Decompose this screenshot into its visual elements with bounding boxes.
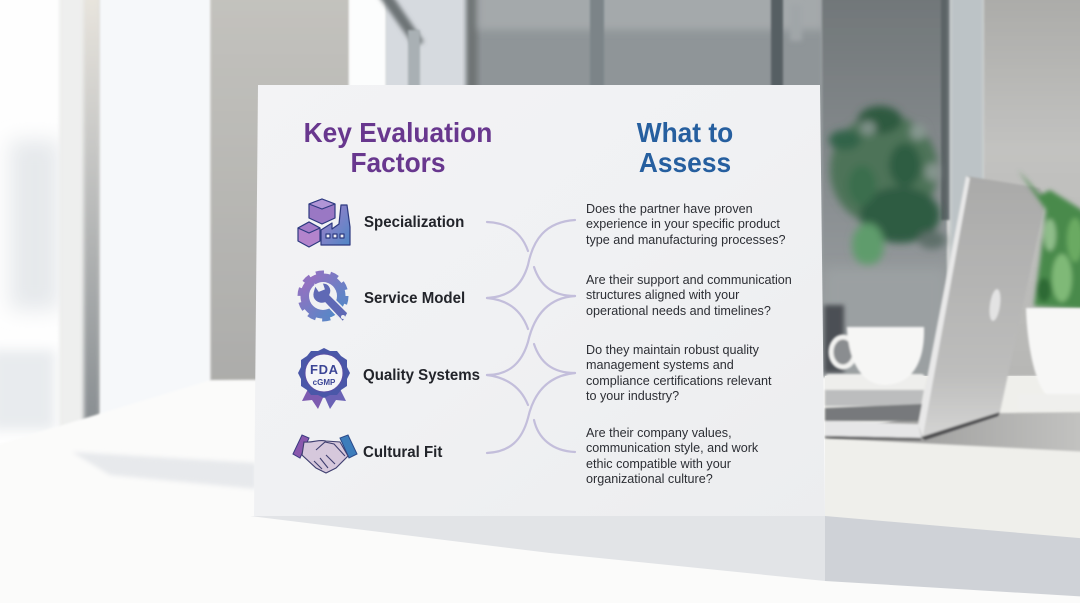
heading: Key Evaluation Factors: Key Evaluation [304,117,492,148]
text: cultural fit question: organizational culture? [586,472,713,486]
icon: FDA cGMP badge: cGMP [313,378,336,387]
text: service model question: structures aligned with your [586,288,739,302]
label: Cultural Fit: Cultural Fit [363,444,442,461]
label: Quality Systems: Quality Systems [363,367,480,384]
icon: gear and wrench [298,270,348,322]
text: quality systems question: Do they maintain robust quality [586,343,759,357]
text: cultural fit question: Are their company values, [586,426,732,440]
text: service model question [586,273,792,318]
text: service model question: Are their support and communication [586,273,792,287]
heading: Key Evaluation Factors [304,117,492,178]
text: cultural fit question [586,426,758,486]
text: service model question: operational needs and timelines? [586,304,771,318]
label: Specialization: Specialization [364,214,464,231]
text: quality systems question: to your industry? [586,389,679,403]
text: specialization question: Does the partner have proven [586,202,753,216]
heading: What to Assess [636,117,733,178]
icon: FDA cGMP badge [298,348,350,409]
blurred background plant [824,106,946,380]
heading: What to Assess: What to [637,117,733,148]
text: quality systems question: management systems and [586,358,734,372]
icon: handshake [292,434,358,474]
heading: What to Assess: Assess [639,147,731,178]
text: cultural fit question: ethic compatible with your [586,457,731,471]
heading: Key Evaluation Factors: Factors [350,147,446,178]
text: specialization question [586,202,786,247]
icon: FDA cGMP badge: FDA [310,362,339,377]
table surface [0,376,1080,603]
white card [254,85,825,516]
laptop [825,176,1046,440]
potted plant [1018,170,1080,410]
label: Service Model: Service Model [364,290,465,307]
text: quality systems question: compliance certifications relevant [586,374,772,388]
icon: boxes and factory [297,198,351,248]
text: quality systems question [586,343,772,403]
text: specialization question: type and manufacturing processes? [586,233,786,247]
coffee cup and saucer [825,327,925,394]
text: cultural fit question: communication style, and work [586,441,758,455]
text: specialization question: experience in your specific product [586,217,780,231]
